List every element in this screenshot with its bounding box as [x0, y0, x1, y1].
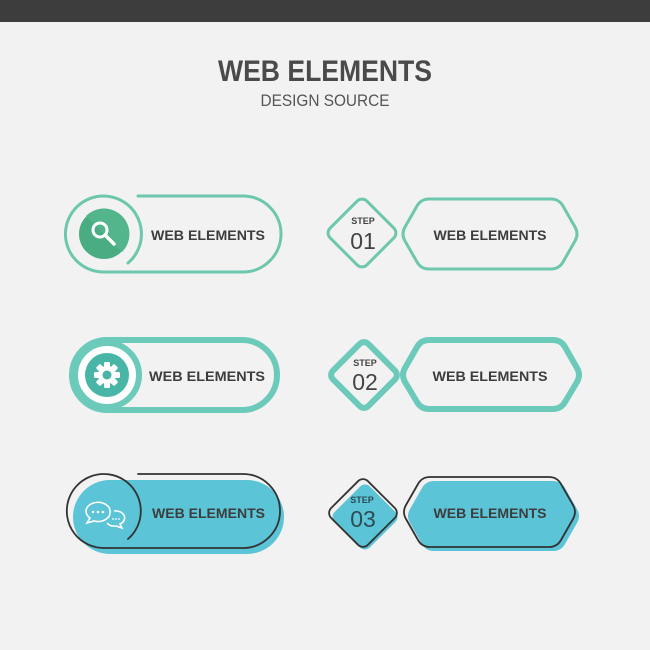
step 02: 02	[352, 369, 378, 395]
hexagon	[403, 199, 577, 269]
label: WEB ELEMENTS	[151, 227, 265, 243]
icon: gear	[85, 353, 129, 397]
step 03: 03	[350, 506, 376, 532]
step 03	[326, 476, 579, 552]
icon: magnifier	[79, 209, 129, 259]
label: WEB ELEMENTS	[152, 505, 265, 521]
step 01	[325, 196, 577, 270]
button: chat pill	[67, 474, 284, 554]
step 01: STEP	[351, 216, 375, 226]
step 02: WEB ELEMENTS	[432, 368, 548, 384]
step 03: STEP	[350, 495, 374, 505]
diamond	[325, 196, 399, 270]
subtitle: DESIGN SOURCE	[260, 91, 390, 110]
step 03: WEB ELEMENTS	[434, 505, 546, 521]
step 02	[329, 340, 579, 410]
step 02: STEP	[353, 358, 377, 368]
step 01: 01	[350, 228, 376, 254]
top bar	[0, 0, 650, 22]
step 01: WEB ELEMENTS	[434, 227, 546, 243]
button: gear pill	[72, 340, 277, 410]
icon: chat bubbles	[86, 502, 125, 528]
title: WEB ELEMENTS	[218, 55, 432, 88]
button: search pill	[65, 196, 281, 272]
label: WEB ELEMENTS	[149, 368, 265, 384]
